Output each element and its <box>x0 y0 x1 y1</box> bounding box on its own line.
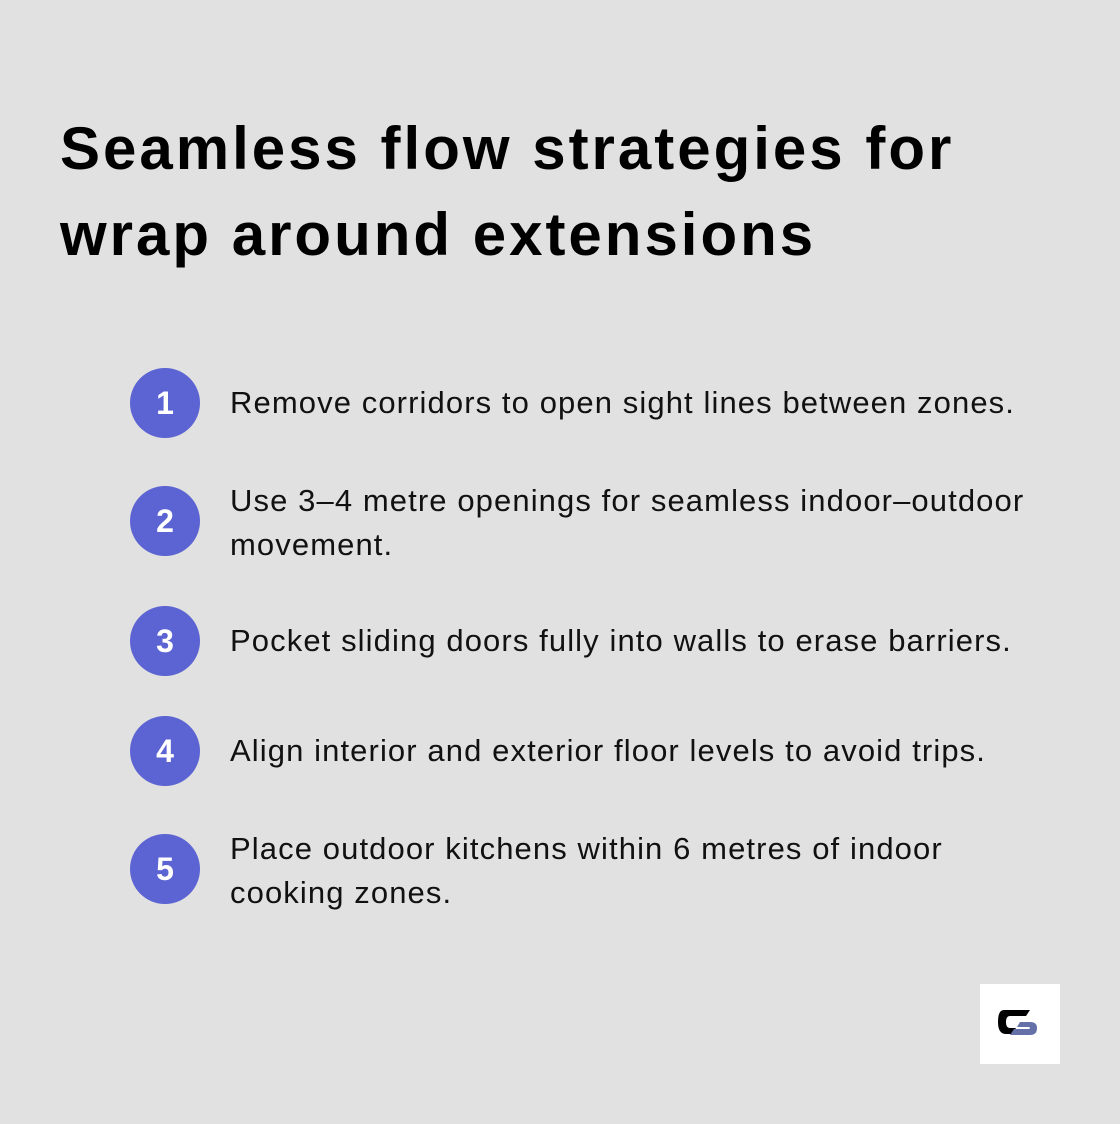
title: Seamless flow strategies for <box>60 115 954 182</box>
item 5: Place outdoor kitchens within 6 metres of indoor <box>230 831 943 866</box>
title <box>60 115 954 268</box>
item 4: 4 <box>156 733 174 769</box>
item 3 <box>130 606 1012 676</box>
item 4 <box>130 716 986 786</box>
item 2: movement. <box>230 527 393 562</box>
item 4: Align interior and exterior floor levels to avoid trips. <box>230 733 986 768</box>
item 1: Remove corridors to open sight lines between zones. <box>230 385 1015 420</box>
item 3: Pocket sliding doors fully into walls to erase barriers. <box>230 623 1012 658</box>
item 1 <box>130 368 1015 438</box>
item 3: 3 <box>156 623 174 659</box>
item 2 <box>130 483 1024 562</box>
title: wrap around extensions <box>60 201 816 268</box>
item 2: 2 <box>156 503 174 539</box>
item 5: cooking zones. <box>230 875 452 910</box>
logo <box>980 984 1060 1064</box>
item 5 <box>130 831 943 910</box>
item 5: 5 <box>156 851 174 887</box>
item 1: 1 <box>156 385 174 421</box>
item 2: Use 3–4 metre openings for seamless indoor–outdoor <box>230 483 1024 518</box>
